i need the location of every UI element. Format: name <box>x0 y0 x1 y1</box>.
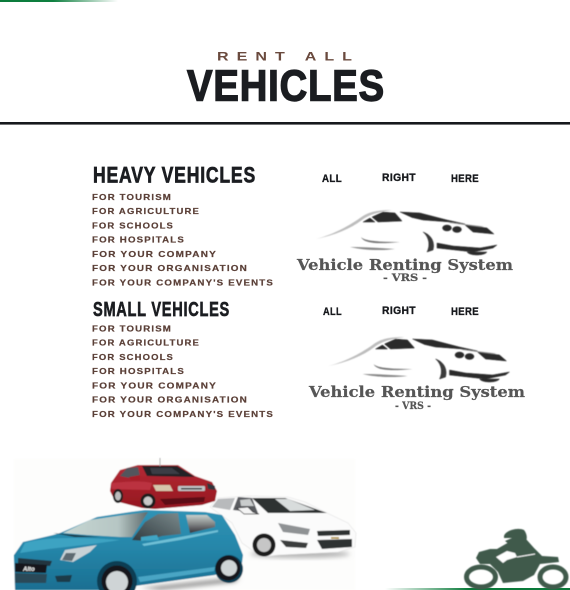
list: heavy vehicle uses: FOR HOSPITALS <box>92 236 185 244</box>
panel: small vehicles <box>92 299 526 419</box>
header divider <box>0 122 570 125</box>
list: heavy vehicle uses: FOR YOUR COMPANY'S EVENTS <box>92 278 274 288</box>
heading: vehicles: VEHICLES <box>187 62 385 110</box>
tagline: all right here: RIGHT <box>382 172 416 184</box>
bike body and rider <box>476 539 559 583</box>
list: heavy vehicle uses: FOR YOUR ORGANISATION <box>92 264 248 273</box>
helmet <box>504 529 527 545</box>
subtitle: rent all: RENT ALL <box>217 50 360 64</box>
list: small vehicle uses: FOR HOSPITALS <box>92 367 185 376</box>
list: small vehicle uses: FOR YOUR ORGANISATION <box>92 396 248 404</box>
tagline: all right here: HERE <box>451 173 479 185</box>
badge: Alto: Alto <box>22 567 35 573</box>
car: white hatchback <box>210 496 356 558</box>
list: heavy vehicle uses: FOR TOURISM <box>92 193 172 202</box>
brand name: Vehicle Renting System <box>296 257 514 274</box>
tagline: all right here <box>323 305 479 318</box>
list: heavy vehicle uses <box>92 193 274 288</box>
logo: vehicle renting system <box>296 210 514 284</box>
tagline: all right here: ALL <box>322 173 342 185</box>
front wheel <box>540 567 566 587</box>
photo: three cars <box>14 458 356 590</box>
thigh line <box>517 554 535 557</box>
heading: heavy vehicles: HEAVY VEHICLES <box>93 162 256 188</box>
tagline: all right here: ALL <box>323 306 342 318</box>
list: small vehicle uses: FOR YOUR COMPANY'S EVENTS <box>92 410 274 419</box>
brand abbreviation: - VRS - <box>383 272 427 284</box>
list: small vehicle uses <box>92 324 274 419</box>
list: small vehicle uses: FOR TOURISM <box>92 324 172 334</box>
top green accent line <box>0 0 118 2</box>
tagline: all right here: RIGHT <box>382 305 416 317</box>
icon: motorcycle rider <box>466 529 566 587</box>
bottom green accent line <box>385 588 570 590</box>
car: red sedan <box>110 458 217 509</box>
list: heavy vehicle uses: FOR YOUR COMPANY <box>92 250 217 259</box>
title <box>187 50 385 110</box>
tagline: all right here <box>322 172 479 185</box>
tagline: all right here: HERE <box>451 306 479 318</box>
icon: car silhouette <box>328 337 510 382</box>
rear wheel <box>466 567 496 587</box>
list: small vehicle uses: FOR YOUR COMPANY <box>92 382 217 390</box>
icon: car silhouette <box>316 210 497 255</box>
list: heavy vehicle uses: FOR AGRICULTURE <box>92 207 200 216</box>
brand abbreviation: - VRS - <box>395 400 431 412</box>
panel: heavy vehicles <box>92 162 514 288</box>
car: blue hatchback <box>14 510 243 590</box>
list: small vehicle uses: FOR AGRICULTURE <box>92 338 200 348</box>
list: heavy vehicle uses: FOR SCHOOLS <box>92 222 174 230</box>
heading: small vehicles: SMALL VEHICLES <box>93 299 230 321</box>
list: small vehicle uses: FOR SCHOOLS <box>92 353 174 362</box>
logo: vehicle renting system <box>308 337 526 412</box>
brand name: Vehicle Renting System <box>308 384 526 401</box>
gap between arm and leg <box>496 551 517 563</box>
